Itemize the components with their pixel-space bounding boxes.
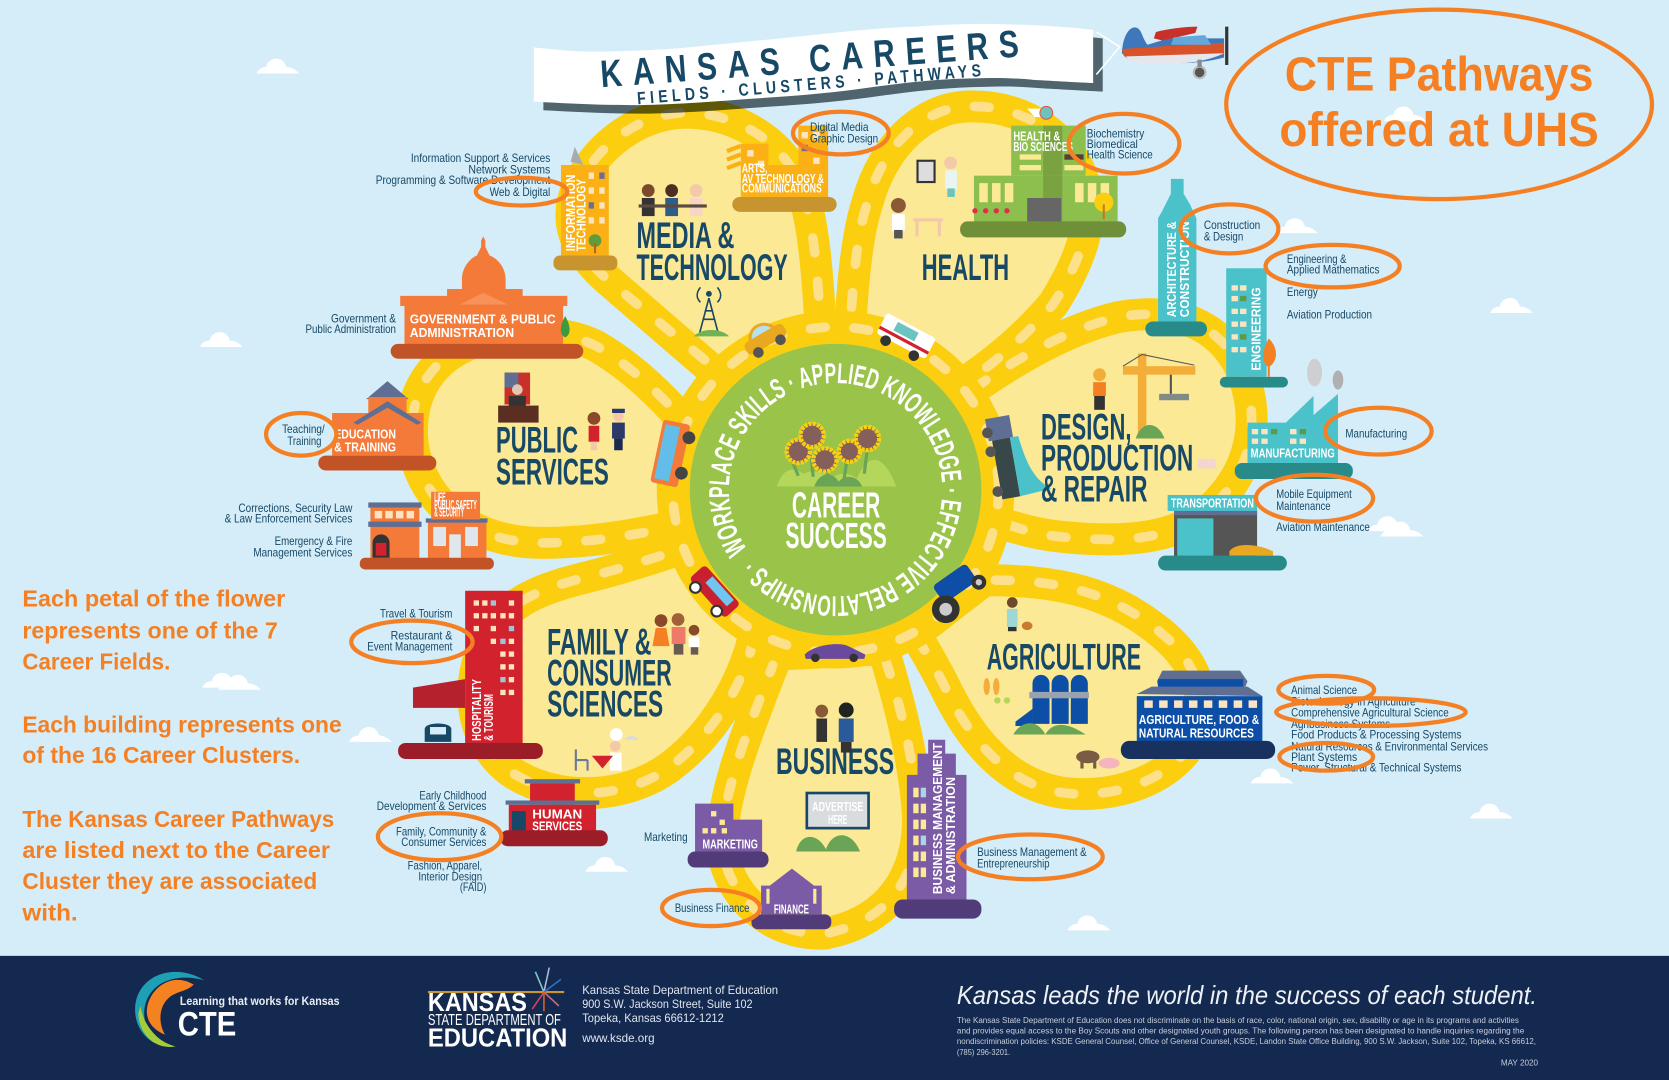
field title: public services: SERVICES: [496, 450, 609, 492]
petal: health: [849, 106, 1088, 383]
icon: crane and worker: [1093, 353, 1216, 468]
pathways: human services: Fashion, Apparel,: [408, 860, 482, 873]
pathways: agriculture: Biotechnology in Agriculture: [1291, 696, 1416, 709]
icon: media team at desk: [639, 184, 707, 216]
cluster: arts av technology and communications: [727, 126, 837, 212]
cluster: information technology: TECHNOLOGY: [573, 178, 588, 251]
pathways: engineering: Aviation Production: [1287, 308, 1372, 321]
cluster: marketing: [688, 804, 769, 868]
field title: agriculture: AGRICULTURE: [987, 636, 1141, 678]
logo: CTE: Learning that works for Kansas: [180, 995, 340, 1008]
vehicle: semi truck: [980, 410, 1052, 501]
text block: explanation: Cluster they are associated: [22, 868, 317, 894]
pathways: agriculture: Animal Science: [1291, 684, 1357, 697]
pathways: manufacturing: [1325, 408, 1432, 455]
cluster: agriculture food and natural resources: NATURAL RESOURCES: [1139, 726, 1254, 741]
cluster: transportation: TRANSPORTATION: [1171, 496, 1254, 511]
pathways: human services: Interior Design: [418, 870, 482, 883]
cluster: manufacturing: [1235, 359, 1353, 479]
icon: doctors and lab: [891, 156, 957, 238]
field title: media and technology: MEDIA &: [637, 214, 734, 256]
vehicle: red van: [684, 565, 740, 623]
pathways: hospitality: Event Management: [367, 640, 453, 653]
pathways: law and safety: [225, 502, 353, 560]
career success label: CAREER: [792, 484, 880, 525]
pathways: finance: Business Finance: [675, 902, 749, 915]
icon: family: [652, 613, 699, 655]
cluster: architecture and construction: ARCHITECTURE &: [1164, 221, 1179, 317]
pathways: health: Biomedical: [1087, 138, 1138, 151]
pathways: finance: [662, 890, 760, 926]
cluster: human services: SERVICES: [532, 818, 583, 833]
petal: public services: [412, 333, 697, 543]
text block: explanation: represents one of the 7: [22, 618, 278, 644]
field title: family and consumer sciences: SCIENCES: [547, 682, 663, 724]
circular ring text: WORKPLACE SKILLS · APPLIED KNOWLEDGE · EFFECTIVE RELATIONSHIPS ·: [709, 363, 962, 616]
petal: family and consumer sciences: [473, 538, 756, 793]
text block: explanation: are listed next to the Career: [22, 837, 330, 863]
icon: business people: [815, 703, 854, 753]
pathways: agriculture: [1276, 676, 1488, 775]
pathways: agriculture: Agribusiness Systems: [1291, 718, 1390, 731]
legal disclaimer: and provides equal access to the Boy Scouts and other designated youth groups. The following person has been designated to handle inquiries regarding the: [957, 1026, 1525, 1036]
pathways: information technology: Web & Digital: [490, 186, 550, 199]
cluster: health and bio sciences: BIO SCIENCES: [1013, 139, 1073, 154]
text block: explanation: [21, 586, 342, 926]
cluster: law public safety and security: & SECURITY: [434, 504, 464, 519]
cluster: transportation: [1158, 495, 1287, 571]
field title: family and consumer sciences: [547, 621, 672, 724]
cluster: hospitality and tourism: [398, 591, 543, 759]
pathways: agriculture: Natural Resources & Environmental Services: [1291, 740, 1488, 753]
contact address: [581, 984, 778, 1045]
legal disclaimer: [957, 1015, 1538, 1068]
callout: CTE pathways at UHS: CTE Pathways: [1285, 48, 1593, 101]
logo: Kansas State Department of Education: EDUCATION: [428, 1024, 567, 1052]
pathways: education: [266, 413, 336, 456]
subtitle: FIELDS · CLUSTERS · PATHWAYS: [636, 62, 982, 109]
cluster: business management and administration: & ADMINISTRATION: [943, 777, 958, 894]
pathways: hospitality: [351, 607, 473, 663]
cluster: hospitality and tourism: & TOURISM: [481, 694, 496, 741]
field title: media and technology: [637, 214, 788, 288]
pathways: information technology: [376, 152, 567, 205]
banner shadow and title: [534, 23, 1103, 114]
pathways: law and safety: & Law Enforcement Services: [225, 513, 352, 526]
cluster: information technology: [553, 147, 617, 270]
icon: radio tower: [694, 287, 729, 336]
logo: Kansas State Department of Education: [428, 968, 567, 1052]
pathways: engineering: [1266, 245, 1400, 321]
pathways: agriculture: Comprehensive Agricultural Science: [1291, 706, 1449, 719]
pathways: information technology: Network Systems: [468, 164, 550, 177]
clouds: [200, 59, 1533, 930]
cluster: engineering: [1220, 268, 1288, 387]
cluster: agriculture food and natural resources: [1121, 671, 1275, 759]
cluster: engineering: ENGINEERING: [1248, 287, 1263, 370]
field title: family and consumer sciences: CONSUMER: [547, 652, 672, 694]
cluster: education and training: & TRAINING: [334, 439, 396, 454]
pathways: engineering: Engineering &: [1287, 253, 1347, 266]
logo: CTE: [135, 972, 340, 1047]
pathways: human services: Early Childhood: [419, 789, 486, 802]
pathways: business management: Business Management &: [977, 846, 1087, 859]
contact address: Kansas State Department of Education: [582, 984, 778, 997]
vehicle: school bus: [650, 419, 698, 489]
field title: business: BUSINESS: [776, 740, 894, 782]
text block: explanation: Career Fields.: [22, 649, 170, 675]
cluster: finance: FINANCE: [774, 901, 809, 916]
logo: CTE: CTE: [178, 1006, 236, 1044]
callout: CTE pathways at UHS: [1226, 10, 1652, 199]
road centre dashes: [412, 106, 1252, 934]
pathways: arts: Digital Media: [810, 121, 869, 134]
tagline: Kansas leads the world in the success of each student.: [957, 982, 1537, 1010]
petal: agriculture: [915, 580, 1201, 794]
logo: Kansas State Department of Education: KANSAS: [428, 989, 527, 1017]
field title: design production and repair: PRODUCTION: [1041, 436, 1193, 478]
pathways: government: Government &: [331, 313, 396, 326]
icon: vet and animals: [1007, 597, 1120, 769]
cluster: law public safety and security: LIFE,: [434, 489, 447, 504]
pathways: human services: (FAID): [460, 881, 487, 894]
icon: billboard: [796, 793, 869, 852]
pathways: government: Public Administration: [305, 323, 396, 336]
cluster: education and training: [318, 381, 436, 470]
petal: design production repair: [963, 314, 1252, 539]
title: KANSAS CAREERS: [599, 23, 1020, 96]
footer band: [0, 956, 1669, 1080]
pathways: human services: Consumer Services: [401, 836, 487, 849]
pathways: education: Training: [287, 435, 321, 448]
pathways: business management: Entrepreneurship: [977, 858, 1050, 871]
icon: biplane: [1096, 27, 1228, 78]
pathways: transportation: Mobile Equipment: [1276, 488, 1352, 501]
pathways: arts: [793, 112, 889, 154]
pathways: education: Teaching/: [282, 423, 325, 436]
cluster: law public safety and security: [360, 489, 494, 569]
pathways: law and safety: Management Services: [253, 547, 352, 560]
centre hub road ring: [657, 311, 1014, 668]
pathways: engineering: Energy: [1287, 286, 1318, 299]
vehicles on ring road: [650, 313, 1052, 662]
pathways: information technology: Information Support & Services: [411, 152, 550, 165]
cluster: hospitality and tourism: HOSPITALITY: [469, 679, 484, 741]
icon: judge bench: [498, 373, 539, 423]
pathways: transportation: Maintenance: [1276, 500, 1331, 513]
cluster: manufacturing: MANUFACTURING: [1251, 446, 1335, 461]
logo: Kansas State Department of Education: STATE DEPARTMENT OF: [428, 1012, 561, 1029]
cluster: architecture and construction: CONSTRUCTION: [1177, 221, 1192, 317]
pathways: government: [305, 313, 396, 336]
pathways: architecture: & Design: [1204, 231, 1243, 244]
pathways: architecture: Construction: [1204, 219, 1260, 232]
field title: family and consumer sciences: FAMILY &: [547, 621, 651, 663]
text block: explanation: Each petal of the flower: [22, 586, 285, 612]
pathways: human services: Development & Services: [377, 800, 487, 813]
pathways: manufacturing: Manufacturing: [1345, 427, 1407, 440]
cluster: marketing: MARKETING: [703, 836, 758, 851]
cluster: information technology: INFORMATION: [563, 175, 578, 251]
cluster: education and training: EDUCATION: [334, 427, 396, 442]
field title: media and technology: TECHNOLOGY: [637, 246, 788, 288]
centre green circle: [690, 344, 982, 636]
pathways: hospitality: Restaurant &: [391, 630, 453, 643]
legal disclaimer: The Kansas State Department of Education does not discriminate on the basis of race, color, national origin, sex, disability or age in its programs and activities: [957, 1015, 1519, 1025]
pathways: engineering: Applied Mathematics: [1287, 264, 1380, 277]
cluster: government and public administration: GOVERNMENT & PUBLIC: [410, 311, 556, 326]
cluster: government and public administration: ADMINISTRATION: [410, 325, 514, 340]
cluster: finance: [751, 869, 831, 929]
legal disclaimer: (785) 296-3201.: [957, 1047, 1010, 1057]
icon: silos and crops: [984, 675, 1089, 734]
cluster: business management and administration: BUSINESS MANAGEMENT: [930, 743, 945, 894]
pathways: health: Health Science: [1087, 149, 1153, 162]
icon: teacher and police officer: [588, 409, 625, 450]
legal disclaimer: MAY 2020: [1501, 1058, 1538, 1068]
text block: explanation: Each building represents one: [22, 711, 342, 737]
icon: billboard: HERE: [828, 812, 848, 827]
pathways: transportation: [1256, 475, 1373, 534]
text block: explanation: The Kansas Career Pathways: [22, 806, 334, 832]
petal: business: [722, 649, 918, 934]
pathways: architecture: [1180, 204, 1278, 253]
pathways: human services: Family, Community &: [396, 826, 487, 839]
field title: public services: PUBLIC: [496, 418, 578, 460]
field title: health: HEALTH: [922, 246, 1009, 288]
vehicle: purple sports car: [805, 644, 865, 662]
icon: sunflowers: [777, 424, 896, 486]
pathways: human services: [377, 789, 501, 894]
pathways: health: [1069, 114, 1179, 174]
pathways: health: Biochemistry: [1087, 127, 1144, 140]
field title: design production and repair: & REPAIR: [1041, 467, 1147, 509]
cluster: arts av technology and communications: ARTS,: [742, 160, 767, 175]
legal disclaimer: nondiscrimination policies: KSDE General Counsel, Office of General Counsel, KSDE, Landon State Office Building, 900 S.W. Jackson, Suite 102, Topeka, KS 66612,: [957, 1036, 1536, 1046]
pathway: marketing: Marketing: [644, 831, 688, 844]
text block: explanation: of the 16 Career Clusters.: [22, 742, 300, 768]
vehicle: blue tractor: [919, 559, 995, 629]
pathways: hospitality: Travel & Tourism: [380, 607, 452, 620]
callout: CTE pathways at UHS: offered at UHS: [1279, 104, 1599, 157]
pathways: law and safety: Corrections, Security Law: [238, 502, 353, 515]
vehicle: yellow car: [738, 313, 791, 362]
cluster: architecture and construction: [1145, 179, 1207, 336]
cluster: health and bio sciences: HEALTH &: [1013, 129, 1060, 144]
pathways: agriculture: Food Products & Processing Systems: [1291, 729, 1462, 742]
text block: explanation: with.: [21, 900, 78, 926]
pathways: agriculture: Power, Structural & Technical Systems: [1291, 762, 1462, 775]
field title: public services: [496, 418, 609, 492]
pathways: law and safety: Emergency & Fire: [275, 535, 352, 548]
field title: design production and repair: DESIGN,: [1041, 406, 1131, 448]
career success label: SUCCESS: [786, 515, 887, 556]
cluster: health and bio sciences: [960, 106, 1126, 237]
cluster: human services: [500, 779, 608, 846]
cluster: agriculture food and natural resources: AGRICULTURE, FOOD &: [1139, 712, 1259, 727]
icon: billboard: ADVERTISE: [812, 799, 864, 814]
cluster: law public safety and security: PUBLIC SAFETY: [434, 497, 477, 512]
pathways: business management: [958, 835, 1103, 879]
pathways: agriculture: Plant Systems: [1291, 751, 1357, 764]
petal: media and technology: [571, 113, 822, 373]
cluster: arts av technology and communications: AV TECHNOLOGY &: [742, 171, 824, 186]
field title: design production and repair: [1041, 406, 1193, 509]
career success label: [786, 484, 887, 556]
pathways: information technology: Programming & Software Development: [376, 174, 551, 187]
pathways: transportation: Aviation Maintenance: [1276, 521, 1370, 534]
flower: seven road petals: [412, 106, 1252, 934]
cluster: arts av technology and communications: COMMUNICATIONS: [742, 181, 822, 196]
contact address: Topeka, Kansas 66612-1212: [582, 1012, 724, 1025]
vehicle: ambulance: [873, 313, 936, 366]
cluster: human services: HUMAN: [532, 807, 582, 822]
cluster: government and public administration: [391, 236, 583, 359]
contact address: www.ksde.org: [581, 1032, 655, 1045]
icon: chef and table: [576, 728, 639, 771]
pathways: arts: Graphic Design: [810, 133, 878, 146]
cluster: business management and administration: [894, 740, 981, 919]
contact address: 900 S.W. Jackson Street, Suite 102: [582, 998, 753, 1011]
